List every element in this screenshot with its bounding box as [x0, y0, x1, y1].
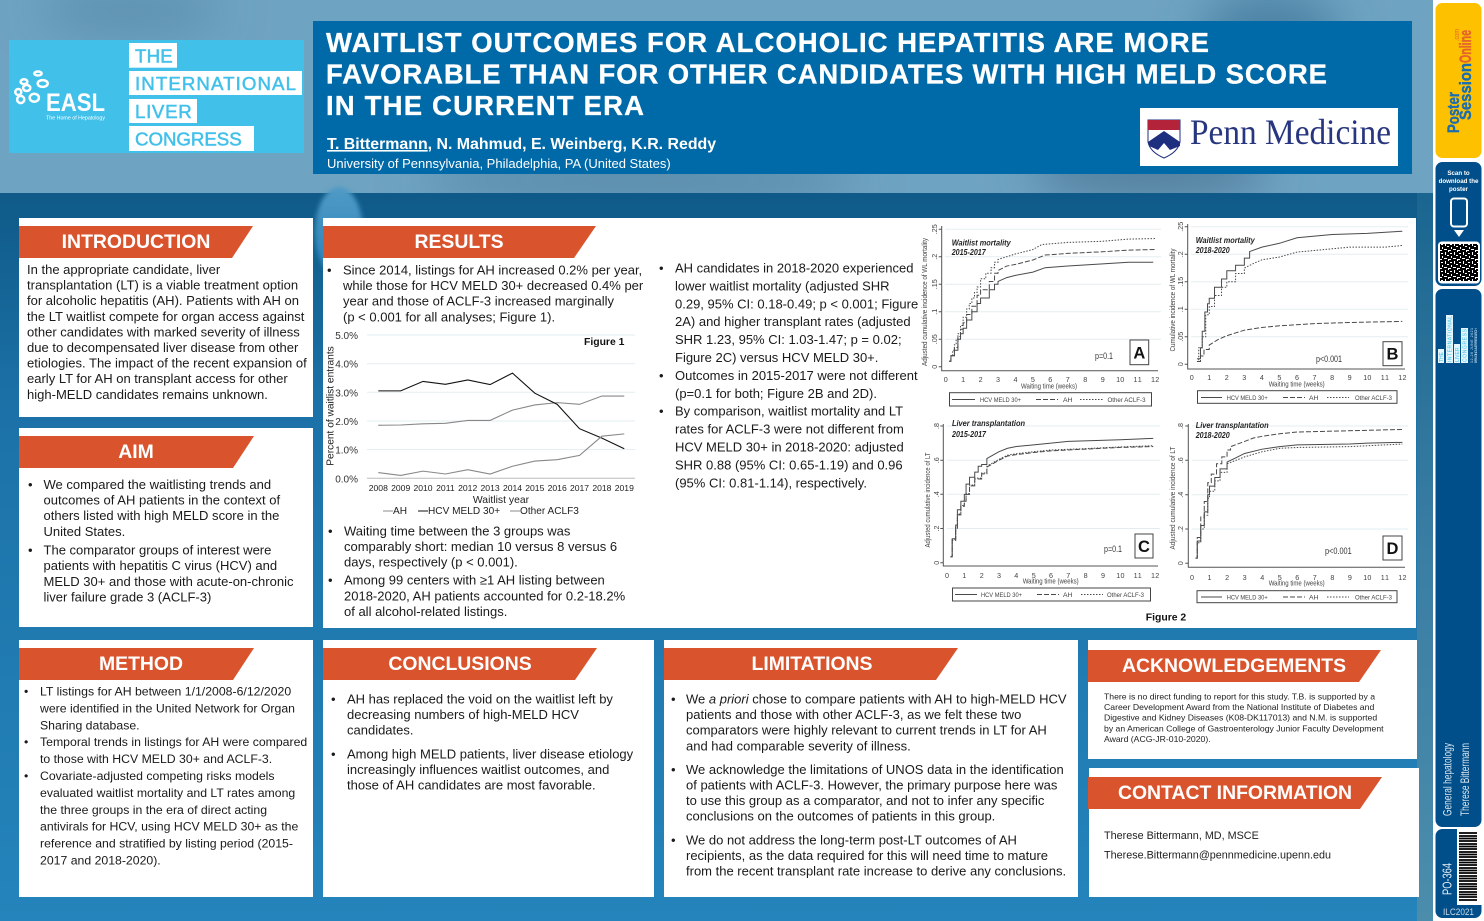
- mini congress logo: INTERNATIONAL: [1448, 316, 1454, 362]
- results text: left column top: Since 2014, listings for AH increased 0.2% per year,: [343, 262, 642, 278]
- chart B: waitlist mortality 2018-2020: p<0.001: [1316, 354, 1342, 364]
- chart B: waitlist mortality 2018-2020: .15: [1176, 277, 1185, 287]
- method bullets: Covariate-adjusted competing risks models: [40, 769, 275, 783]
- chart D: liver transplantation 2018-2020: .4: [1176, 492, 1185, 498]
- EASL and International Liver Congress logo: [9, 40, 304, 153]
- heading: method: [19, 648, 254, 680]
- conclusions bullets: decreasing numbers of high-MELD HCV: [347, 707, 579, 722]
- chart D: liver transplantation 2018-2020: Adjusted cumulative incidence of LT: [1168, 446, 1177, 550]
- sidebar: PosterSessionOnline logo: [1436, 3, 1482, 158]
- y axis labels: 0.0%: [335, 474, 358, 485]
- sidebar: poster number and barcode: [1436, 829, 1482, 918]
- chart A: waitlist mortality 2015-2017: p=0.1: [1095, 351, 1113, 361]
- chart D: liver transplantation 2018-2020: [1168, 420, 1408, 603]
- chart B: waitlist mortality 2018-2020: .05: [1176, 332, 1185, 342]
- panel: aim: [19, 428, 313, 627]
- legend C: [952, 588, 1150, 601]
- panel: limitations: [664, 640, 1078, 897]
- conclusions bullets: increasingly influences waitlist outcomes, and: [347, 762, 609, 777]
- chart D: liver transplantation 2018-2020: 0: [1176, 561, 1185, 565]
- legend C: Other ACLF-3: [1107, 592, 1144, 599]
- sidebar: PosterSessionOnline logo: Online: [1456, 30, 1475, 63]
- method bullets: Temporal trends in listings for AH were compared: [40, 735, 307, 749]
- panel letter D: [1383, 536, 1402, 560]
- results text: middle column: •: [659, 260, 664, 276]
- sidebar: PosterSessionOnline logo: .com: [1454, 29, 1461, 41]
- y axis title: Percent of waitlist entrants: [326, 346, 336, 466]
- x axis title: Waitlist year: [473, 495, 530, 506]
- icon: phone: [1451, 198, 1467, 226]
- conclusions bullets: those of AH candidates are most favorable.: [347, 778, 596, 792]
- x axis labels: 2015: [525, 483, 545, 493]
- x axis labels: 2019: [615, 483, 634, 493]
- x axis labels: 2012: [458, 483, 477, 493]
- aim bullets: outcomes of AH patients in the context of: [44, 493, 280, 508]
- results text: middle column: By comparison, waitlist mortality and LT: [675, 404, 903, 419]
- mini congress logo: THE: [1439, 351, 1445, 362]
- chart B: waitlist mortality 2018-2020: .2: [1176, 251, 1185, 257]
- legend D: HCV MELD 30+: [1227, 594, 1268, 602]
- results text: middle column: HCV MELD 30+ in 2018-2020: adjusted: [675, 440, 904, 454]
- heading: aim: AIM: [118, 441, 154, 463]
- y axis labels: 2.0%: [335, 417, 358, 428]
- results text: left column bottom: •: [328, 573, 333, 588]
- congress wordmark: INTERNATIONAL: [135, 73, 296, 94]
- results text: middle column: •: [659, 368, 664, 383]
- panel letter C: [1135, 534, 1153, 558]
- chart A: waitlist mortality 2015-2017: [920, 224, 1161, 406]
- chart B: waitlist mortality 2018-2020: Waitlist mortality: [1196, 235, 1255, 245]
- sidebar: scan to download: [1436, 162, 1482, 286]
- chart B: waitlist mortality 2018-2020: Cumulative incidence of WL mortality: [1168, 248, 1177, 352]
- legend: Other ACLF3: [520, 506, 579, 517]
- method bullets: 2017 and 2018-2020).: [40, 854, 161, 868]
- results text: middle column: rates for ACLF-3 were not different from: [675, 422, 904, 437]
- heading: conclusions: CONCLUSIONS: [388, 653, 532, 675]
- results text: left column bottom: 2018-2020, AH patients accounted for 0.2-18.2%: [344, 588, 626, 603]
- heading: acknowledgements: [1088, 650, 1381, 682]
- figure 1 caption: Figure 1: [584, 337, 625, 348]
- legend D: [1197, 591, 1397, 603]
- conclusions bullets: Among high MELD patients, liver disease etiology: [347, 746, 634, 761]
- icon: Penn shield: [1148, 120, 1180, 158]
- limitations bullets: from the recent transplant rate increase to derive any conclusions.: [686, 864, 1066, 878]
- heading: introduction: INTRODUCTION: [62, 231, 210, 253]
- contact details: Therese.Bittermann@pennmedicine.upenn.edu: [1104, 850, 1331, 862]
- limitations bullets: to use this group as a comparator, and not to infer any specific: [686, 793, 1045, 808]
- aim bullets: patients with hepatitis C virus (HCV) and: [44, 558, 277, 573]
- chart D: liver transplantation 2018-2020: Waiting time (weeks): [1269, 578, 1325, 588]
- heading: contact information: [1088, 777, 1382, 809]
- heading: contact information: CONTACT INFORMATION: [1118, 782, 1352, 804]
- chart C: liver transplantation 2015-2017: 2015-2017: [951, 429, 986, 439]
- heading: aim: [19, 436, 254, 468]
- results text: middle column: 2A) and higher transplant rates (adjusted: [675, 314, 911, 329]
- chart C: liver transplantation 2015-2017: .8: [932, 423, 941, 429]
- method bullets: the three groups in the era of direct acting: [40, 803, 267, 817]
- chart C: liver transplantation 2015-2017: Waiting time (weeks): [1023, 576, 1079, 586]
- mini congress logo: LIVER: [1455, 347, 1461, 362]
- aim bullets: •: [28, 477, 33, 492]
- chart D: liver transplantation 2018-2020: Liver transplantation: [1196, 420, 1269, 430]
- method bullets: evaluated waitlist mortality and LT rates among: [40, 786, 295, 800]
- legend A: AH: [1063, 397, 1073, 404]
- panel letter C: C: [1138, 538, 1150, 556]
- results text: middle column: SHR 1.23, 95% CI: 1.03-1.47; p = 0.02;: [675, 332, 902, 347]
- introduction text: due to decompensated liver disease from other: [27, 340, 299, 355]
- acknowledgements text: There is no direct funding to report for this study. T.B. is supported by a: [1104, 692, 1375, 702]
- congress wordmark: CONGRESS: [135, 129, 242, 150]
- Penn Medicine logo: Penn Medicine: [1190, 112, 1391, 152]
- scan text: poster: [1449, 186, 1469, 193]
- panel: acknowledgements: [1088, 640, 1417, 759]
- method bullets: were identified in the United Network for Organ: [39, 701, 295, 715]
- y axis labels: 4.0%: [335, 360, 358, 371]
- results text: middle column: AH candidates in 2018-2020 experienced: [675, 260, 914, 276]
- results text: left column top: while those for HCV MELD 30+ decreased 0.4% per: [342, 278, 644, 293]
- legend B: Other ACLF-3: [1355, 395, 1392, 402]
- congress wordmark: LIVER: [135, 101, 192, 122]
- aim bullets: The comparator groups of interest were: [44, 543, 271, 558]
- chart D: liver transplantation 2018-2020: 2018-2020: [1195, 430, 1230, 440]
- mini congress logo: CONGRESS: [1462, 328, 1468, 362]
- chart C: liver transplantation 2015-2017: .6: [932, 457, 941, 463]
- conclusions bullets: •: [331, 692, 336, 706]
- legend B: HCV MELD 30+: [1227, 395, 1268, 402]
- chart B: waitlist mortality 2018-2020: 0123456789101112: [1190, 373, 1406, 382]
- chart C: liver transplantation 2015-2017: p=0.1: [1104, 544, 1122, 554]
- heading: limitations: LIMITATIONS: [752, 653, 873, 675]
- results text: left column top: (p < 0.001 for all analyses; Figure 1).: [343, 309, 555, 324]
- figure 2 caption: Figure 2: [1146, 612, 1186, 624]
- method bullets: reference and stratified by listing period (2015-: [40, 837, 293, 851]
- chart A: waitlist mortality 2015-2017: 2015-2017: [951, 247, 986, 257]
- limitations bullets: We do not address the long-term post-LT outcomes of AH: [686, 832, 1017, 847]
- y axis labels: 1.0%: [335, 446, 358, 457]
- x axis labels: 2013: [481, 483, 500, 493]
- conclusions bullets: •: [331, 746, 336, 761]
- acknowledgements text: by an American College of Gastroenterology Junior Faculty Development: [1104, 723, 1384, 733]
- chart A: waitlist mortality 2015-2017: 0: [930, 365, 939, 369]
- legend C: HCV MELD 30+: [981, 592, 1022, 599]
- sidebar: PosterSessionOnline logo: Session: [1456, 63, 1475, 120]
- limitations bullets: of patients with ACLF-3. However, the primary purpose here was: [686, 778, 1058, 792]
- chart A: waitlist mortality 2015-2017: .25: [930, 224, 939, 234]
- heading: results: [323, 226, 596, 258]
- method bullets: •: [24, 769, 28, 783]
- chart D: liver transplantation 2018-2020: 0123456789101112: [1190, 573, 1406, 582]
- chart A: waitlist mortality 2015-2017: .2: [930, 254, 939, 260]
- aim bullets: We compared the waitlisting trends and: [44, 477, 271, 492]
- limitations bullets: We: [686, 692, 709, 706]
- results text: middle column: 0.29, 95% CI: 0.18-0.49; p < 0.001; Figure: [675, 296, 918, 311]
- barcode: [1459, 833, 1477, 900]
- legend D: AH: [1309, 594, 1319, 602]
- results text: left column bottom: Waiting time between the 3 groups was: [344, 524, 571, 538]
- legend: AH: [393, 506, 407, 517]
- chart A: waitlist mortality 2015-2017: .1: [930, 309, 939, 315]
- chart D: liver transplantation 2018-2020: p<0.001: [1325, 546, 1352, 556]
- method bullets: Sharing database.: [40, 718, 140, 732]
- limitations bullets: and had comparable severity of illness.: [686, 738, 911, 753]
- series: [378, 373, 624, 475]
- chart D: liver transplantation 2018-2020: .8: [1176, 423, 1185, 429]
- results text: middle column: Figure 2C) versus HCV MELD 30+.: [675, 350, 878, 365]
- legend A: Other ACLF-3: [1108, 397, 1146, 404]
- legend A: [950, 393, 1152, 406]
- chart A: waitlist mortality 2015-2017: .15: [930, 279, 939, 289]
- panel: results: [323, 218, 1416, 628]
- heading: acknowledgements: ACKNOWLEDGEMENTS: [1122, 655, 1346, 677]
- chart C: liver transplantation 2015-2017: Liver transplantation: [952, 418, 1025, 428]
- panel: introduction: [19, 218, 313, 417]
- y axis labels: 5.0%: [335, 331, 358, 342]
- title: [326, 27, 1327, 121]
- chart B: waitlist mortality 2018-2020: Waiting time (weeks): [1269, 380, 1325, 388]
- heading: conclusions: [323, 648, 597, 680]
- panel: method: [19, 640, 313, 897]
- panel letter A: A: [1133, 344, 1145, 362]
- method bullets: •: [24, 684, 28, 698]
- results text: middle column: lower waitlist mortality (adjusted SHR: [675, 278, 890, 293]
- aim bullets: others listed with high MELD score in the: [44, 508, 279, 523]
- limitations bullets: comparators were highly relevant to current trends in LT for AH: [686, 723, 1047, 738]
- results text: middle column: Outcomes in 2015-2017 were not different: [675, 368, 918, 383]
- x axis labels: 2010: [413, 483, 433, 493]
- limitations bullets: •: [671, 692, 676, 706]
- chart C: liver transplantation 2015-2017: .2: [932, 526, 941, 532]
- heading: limitations: [664, 648, 958, 680]
- introduction text: In the appropriate candidate, liver: [27, 262, 221, 277]
- Penn Medicine logo: [1140, 108, 1398, 166]
- EASL wordmark: EASL: [46, 90, 105, 117]
- aim bullets: •: [28, 543, 33, 558]
- panel: conclusions: [323, 640, 654, 897]
- introduction text: the LT waitlist compete for organ access against: [27, 309, 305, 324]
- chart C: liver transplantation 2015-2017: [923, 418, 1160, 601]
- sidebar: poster details: [1436, 289, 1482, 827]
- panel letter A: [1130, 340, 1149, 365]
- acknowledgements text: Award (ACG-JR-010-2020).: [1104, 734, 1211, 744]
- results text: left column bottom: days, respectively (p < 0.001).: [344, 555, 518, 570]
- poster number: PO-364: [1440, 863, 1454, 895]
- title: IN THE CURRENT ERA: [326, 90, 644, 121]
- results text: left column bottom: Among 99 centers with ≥1 AH listing between: [344, 573, 605, 588]
- panel letter B: B: [1387, 346, 1399, 364]
- panel: contact information: [1088, 768, 1419, 897]
- chart A: waitlist mortality 2015-2017: 0123456789101112: [944, 375, 1159, 384]
- presenter: Therese Bittermann: [1459, 743, 1472, 816]
- chart B: waitlist mortality 2018-2020: .1: [1176, 306, 1185, 312]
- chart D: liver transplantation 2018-2020: .6: [1176, 457, 1185, 463]
- x axis labels: 2017: [570, 483, 589, 493]
- conclusions bullets: AH has replaced the void on the waitlist left by: [347, 692, 613, 706]
- scan text: Scan to: [1447, 170, 1470, 177]
- title: FAVORABLE THAN FOR OTHER CANDIDATES WITH HIGH MELD SCORE: [326, 58, 1327, 90]
- introduction text: high-MELD candidates remains unknown.: [27, 387, 268, 402]
- method bullets: LT listings for AH between 1/1/2008-6/12/2020: [40, 684, 291, 698]
- introduction text: etiologies. The impact of the recent expansion of: [27, 356, 307, 371]
- chart A: waitlist mortality 2015-2017: .05: [930, 334, 939, 344]
- acknowledgements text: Career Development Award from the National Institute of Diabetes and: [1104, 702, 1374, 712]
- method bullets: •: [24, 735, 28, 749]
- legend D: Other ACLF-3: [1355, 594, 1392, 602]
- x axis labels: 2011: [436, 483, 455, 493]
- icon: arrow down: [1454, 230, 1464, 237]
- chart C: liver transplantation 2015-2017: Adjusted cumulative incidence of LT: [923, 452, 932, 548]
- method bullets: antivirals for HCV, using HCV MELD 30+ as the: [40, 820, 298, 834]
- chart B: waitlist mortality 2018-2020: 2018-2020: [1195, 245, 1230, 255]
- aim bullets: United States.: [44, 524, 125, 539]
- results text: middle column: (95% CI: 0.81-1.14), respectively.: [675, 475, 867, 490]
- chart B: waitlist mortality 2018-2020: 0: [1176, 362, 1185, 366]
- results text: middle column: •: [659, 404, 664, 419]
- chart B: waitlist mortality 2018-2020: .25: [1176, 222, 1185, 232]
- results text: left column top: year and those of ACLF-3 increased marginally: [343, 294, 614, 309]
- icon: EASL hexagons: [15, 72, 48, 103]
- congress wordmark: [129, 43, 302, 151]
- chart C: liver transplantation 2015-2017: 0: [932, 561, 941, 565]
- aim bullets: liver failure grade 3 (ACLF-3): [44, 589, 211, 604]
- contact details: Therese Bittermann, MD, MSCE: [1104, 830, 1259, 842]
- x axis labels: 2016: [548, 483, 567, 493]
- sidebar: PosterSessionOnline logo: Poster: [1444, 92, 1463, 133]
- EASL and International Liver Congress logo: The Home of Hepatology: [46, 116, 106, 122]
- results text: left column bottom: of all alcohol-related listings.: [344, 604, 507, 619]
- panel letter B: [1383, 342, 1402, 366]
- method bullets: to those with HCV MELD 30+ and ACLF-3.: [40, 752, 272, 766]
- limitations bullets: a priori chose to compare patients with AH to high-MELD HCV: [709, 692, 1067, 706]
- x axis labels: 2009: [391, 483, 410, 493]
- panel letter D: D: [1387, 540, 1399, 558]
- limitations bullets: recipients, as the data required for this will need time to mature: [686, 848, 1048, 863]
- congress code: ILC2021: [1443, 907, 1474, 917]
- chart A: waitlist mortality 2015-2017: Waitlist mortality: [952, 238, 1011, 248]
- line chart: figure 1: [326, 331, 635, 517]
- mini congress logo: BRINGING LIVER RESEARCH: [1474, 328, 1478, 363]
- congress wordmark: THE: [135, 46, 173, 67]
- introduction text: for alcoholic hepatitis (AH). Patients with AH on: [27, 293, 299, 308]
- chart C: liver transplantation 2015-2017: .4: [932, 491, 941, 497]
- results text: left column bottom: comparably short: median 10 versus 8 versus 6: [344, 539, 617, 554]
- authors: T. Bittermann, N. Mahmud, E. Weinberg, K.R. Reddy: [327, 136, 716, 153]
- introduction text: early LT for AH on transplant access for other: [27, 371, 288, 386]
- heading: results: RESULTS: [414, 231, 504, 253]
- chart D: liver transplantation 2018-2020: .2: [1176, 526, 1185, 532]
- introduction text: other candidates with marked severity of illness: [27, 324, 300, 339]
- chart C: liver transplantation 2015-2017: 0123456789101112: [945, 571, 1159, 580]
- acknowledgements text: Digestive and Kidney Diseases (K08-DK117013) and N.M. is supported: [1104, 713, 1377, 723]
- results text: middle column: (p=0.1 for both; Figure 2B and 2D).: [675, 386, 877, 401]
- chart A: waitlist mortality 2015-2017: Waiting time (weeks): [1021, 382, 1077, 390]
- x axis labels: 2018: [592, 483, 612, 493]
- title banner: [313, 21, 1412, 174]
- title: WAITLIST OUTCOMES FOR ALCOHOLIC HEPATITIS ARE MORE: [326, 27, 1209, 58]
- heading: introduction: [19, 226, 253, 258]
- limitations bullets: •: [671, 762, 676, 777]
- limitations bullets: patients and those with other ACLF-3, as we felt these two: [686, 707, 1021, 722]
- heading: method: METHOD: [99, 653, 183, 675]
- y axis labels: 3.0%: [335, 388, 358, 399]
- mini congress logo: 12-26 JUNE 2021: [1470, 328, 1474, 363]
- topic: General hepatology: [1442, 743, 1455, 816]
- scan text: download the: [1439, 178, 1479, 185]
- legend B: AH: [1309, 395, 1319, 402]
- results text: left column bottom: •: [328, 524, 333, 538]
- legend: [383, 506, 579, 517]
- results text: middle column: SHR 0.88 (95% CI: 0.65-1.19) and 0.96: [675, 457, 903, 472]
- chart B: waitlist mortality 2018-2020: [1168, 222, 1408, 403]
- aim bullets: MELD 30+ and those with acute-on-chronic: [44, 574, 294, 589]
- legend B: [1198, 391, 1397, 403]
- chart A: waitlist mortality 2015-2017: Adjusted cumulative incidence of WL mortality: [920, 238, 929, 366]
- limitations bullets: conclusions on the outcomes of patients in this group.: [686, 809, 995, 824]
- x axis labels: 2014: [503, 483, 522, 493]
- legend: HCV MELD 30+: [428, 506, 500, 517]
- legend A: HCV MELD 30+: [980, 397, 1021, 404]
- legend C: AH: [1063, 592, 1073, 599]
- limitations bullets: We acknowledge the limitations of UNOS data in the identification: [686, 762, 1064, 777]
- y axis labels: [335, 331, 358, 485]
- limitations bullets: •: [671, 832, 676, 847]
- x axis labels: 2008: [369, 483, 388, 493]
- introduction text: transplantation (LT) is a viable treatment option: [27, 278, 298, 293]
- QR code: [1438, 242, 1480, 284]
- results text: left column top: •: [327, 262, 332, 278]
- mini congress logo: [1438, 315, 1478, 363]
- affiliation: University of Pennsylvania, Philadelphia, PA (United States): [327, 156, 671, 171]
- conclusions bullets: candidates.: [347, 723, 414, 738]
